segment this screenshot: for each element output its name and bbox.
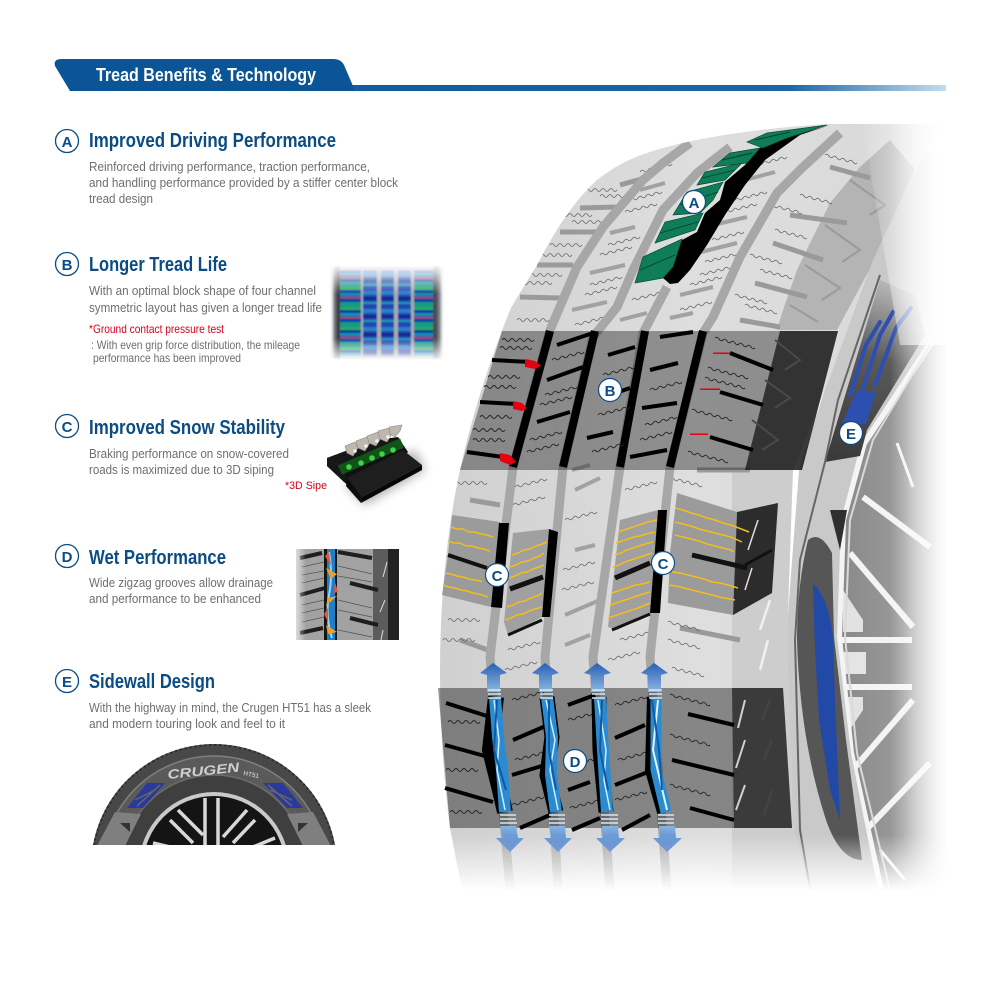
bottom fade <box>430 835 960 891</box>
body E <box>89 700 371 731</box>
sidewall tire photo: HT51 <box>243 770 260 780</box>
section E: sidewall design <box>54 668 371 845</box>
blue sidewall graphic upper <box>842 308 911 424</box>
body A <box>89 159 398 206</box>
callout D <box>564 750 586 772</box>
body C: Braking performance on snow-covered <box>89 446 289 461</box>
badge C <box>56 414 78 438</box>
band B black slots <box>467 332 773 457</box>
band B sipes <box>473 337 755 463</box>
arrow 4 <box>641 663 682 852</box>
header tab <box>55 59 354 91</box>
circumferential grooves <box>490 133 840 890</box>
heading E: Sidewall Design <box>89 671 215 693</box>
body C: roads is maximized due to 3D siping <box>89 462 274 477</box>
body E: and modern touring look and feel to it <box>89 716 285 731</box>
badge A <box>56 130 78 152</box>
header title: Tread Benefits & Technology <box>96 64 317 85</box>
callout B: B <box>605 383 616 400</box>
3D sipe label: *3D Sipe <box>285 480 327 492</box>
body C <box>89 446 289 477</box>
block C2 <box>504 529 558 635</box>
badge B <box>56 252 78 276</box>
band B shoulder chevrons <box>752 340 800 450</box>
callout E <box>840 422 862 444</box>
badge E <box>56 670 78 692</box>
badge B: B <box>62 257 73 274</box>
section B: longer tread life <box>56 252 446 365</box>
green blocks <box>635 125 827 283</box>
body A: tread design <box>89 191 153 206</box>
block C3 <box>608 510 667 630</box>
band B: ground contact <box>460 331 838 470</box>
badge D: D <box>62 549 73 566</box>
callout B <box>598 378 622 402</box>
block C1 <box>442 515 509 608</box>
badge C: C <box>62 419 73 436</box>
main tire illustration <box>438 124 940 888</box>
body A: and handling performance provided by a stiffer center block <box>89 175 398 190</box>
arrow 2 <box>532 663 572 852</box>
callout C right <box>652 552 674 574</box>
tire brand lettering: CRUGEN <box>167 759 241 782</box>
badge D <box>56 544 78 568</box>
wheel and rim <box>837 345 940 886</box>
sidewall tire photo <box>93 744 335 845</box>
band B dark shoulder <box>745 331 838 470</box>
lateral shoulder slots <box>460 167 870 650</box>
right fade <box>890 110 948 910</box>
pressure map thumbnail <box>328 264 446 362</box>
body B <box>89 283 322 315</box>
bottom mask <box>430 890 960 915</box>
body B: symmetric layout has given a longer tread life <box>89 300 322 315</box>
3D sipe block illustration <box>327 425 425 505</box>
band D slots <box>445 695 734 830</box>
body B: With an optimal block shape of four channel <box>89 283 316 298</box>
band B black grooves <box>513 331 703 467</box>
section C: improved snow stability <box>56 414 425 505</box>
body A: Reinforced driving performance, traction performance, <box>89 159 370 174</box>
shoulder highlights <box>759 600 771 670</box>
water arrows <box>480 663 682 852</box>
band D dark shoulder <box>732 688 792 828</box>
pressure test detail: performance has been improved <box>93 351 241 365</box>
heading D: Wet Performance <box>89 547 226 569</box>
body E: With the highway in mind, the Crugen HT51 has a sleek <box>89 700 371 715</box>
callout C left: C <box>492 568 503 585</box>
center block slots <box>565 172 775 645</box>
heading C: Improved Snow Stability <box>89 417 286 439</box>
lower sidewall carbon <box>797 537 862 860</box>
tire callout badges <box>486 190 862 772</box>
band D: wet grooves <box>438 688 792 830</box>
callout D: D <box>570 754 581 771</box>
arrow 1 <box>480 663 524 852</box>
band D sipes <box>446 692 710 814</box>
green center block highlight A <box>635 125 830 284</box>
pressure test detail: : With even grip force distribution, the mileage <box>91 338 300 352</box>
sidewall <box>787 153 950 905</box>
callout E: E <box>846 426 856 443</box>
blue sidewall graphic lower <box>813 583 840 820</box>
arrow 3 <box>584 663 625 852</box>
right mask <box>946 100 966 915</box>
shoulder chevrons <box>790 180 885 322</box>
heading A: Improved Driving Performance <box>89 130 336 152</box>
body D <box>89 575 273 606</box>
callout A <box>682 190 706 214</box>
callout A: A <box>689 195 700 212</box>
callout C left <box>486 564 508 586</box>
badge A: A <box>62 134 73 151</box>
tread <box>440 124 916 886</box>
block C4 <box>668 493 778 615</box>
right shoulder shading <box>777 140 915 330</box>
pressure test detail <box>91 338 300 365</box>
badge E: E <box>62 674 72 691</box>
wet groove thumbnail <box>290 549 399 640</box>
section A: improved driving performance <box>56 130 398 206</box>
black sidewall wedge <box>830 510 847 550</box>
body D: Wide zigzag grooves allow drainage <box>89 575 273 590</box>
black groove beside green blocks <box>663 125 830 284</box>
band C: 3D sipe blocks <box>442 493 778 635</box>
pressure test note: *Ground contact pressure test <box>89 322 225 336</box>
band B red contact marks <box>500 352 730 465</box>
header banner <box>55 59 946 91</box>
body D: and performance to be enhanced <box>89 591 261 606</box>
dark sidewall segment <box>825 280 925 462</box>
callout C right: C <box>658 556 669 573</box>
tread sipes <box>443 154 857 677</box>
header rule <box>72 85 946 91</box>
upper right fade <box>860 110 948 345</box>
heading B: Longer Tread Life <box>89 254 227 276</box>
section D: wet performance <box>56 544 399 640</box>
